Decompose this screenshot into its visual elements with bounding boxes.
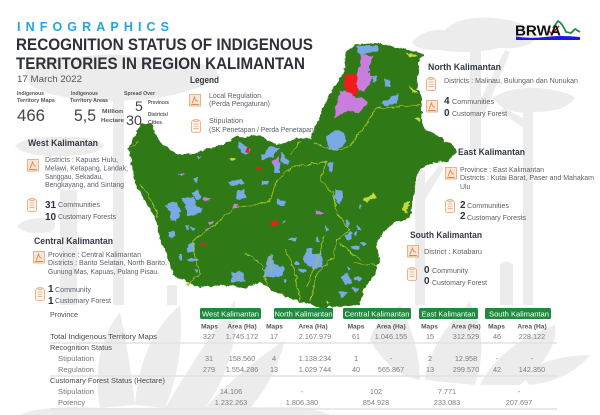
panel: North Kalimantan: North Kalimantan	[428, 62, 501, 72]
panel: North Kalimantan: 0	[444, 108, 450, 119]
purple: regulation areas	[179, 55, 373, 230]
row: recognition regulation: 142.350	[519, 365, 545, 374]
stat: spread: Districts/	[148, 112, 169, 118]
legend: (SK Penetapan / Perda Penetapan)	[209, 127, 316, 134]
stat: territory maps	[17, 91, 55, 125]
panel: Central Kalimantan: Customary Forest	[55, 298, 111, 305]
row: recognition stipulation: 1.138.234	[299, 354, 331, 363]
icon: regulation	[446, 168, 456, 179]
panel: North Kalimantan: Communities	[452, 99, 495, 106]
stat: territory areas: Indigenous	[71, 91, 98, 97]
panel: West Kalimantan: Customary Forests	[58, 214, 117, 221]
header	[16, 20, 313, 85]
icon: local regulation	[190, 94, 200, 106]
row: recognition stipulation: -	[496, 354, 499, 363]
panel: East Kalimantan: Ulu	[460, 184, 471, 191]
legend: Legend	[190, 75, 219, 85]
panel: North Kalimantan: Districts : Malinau, Bulungan dan Nunukan	[444, 78, 578, 85]
row: total maps: 312.529	[453, 332, 479, 341]
panel: Central Kalimantan	[34, 236, 167, 307]
legend: (Perda Pengaturan)	[209, 101, 270, 108]
row: recognition status heading: Recognition Status	[50, 343, 112, 352]
row: recognition regulation: 279	[203, 365, 215, 374]
row: recognition stipulation: -	[390, 354, 393, 363]
date: 17 March 2022	[17, 74, 82, 85]
column tabs: East Kalimantan	[422, 312, 476, 318]
column headers: Area (Ha)	[376, 324, 406, 330]
panel: East Kalimantan: 2	[460, 200, 466, 211]
stat: territory maps: Territory Maps	[17, 98, 55, 104]
panel: West Kalimantan: 10	[45, 212, 57, 223]
stat: territory areas	[70, 91, 124, 125]
row: forest stipulation: 102	[370, 387, 382, 396]
row: forest potency	[58, 398, 532, 407]
row: customary forest heading: Customary Forest Status (Hectare)	[50, 376, 165, 385]
row: total maps: Total Indigenous Territory Maps	[50, 332, 157, 341]
panel: South Kalimantan	[408, 230, 487, 287]
row: total maps: 1.745.172	[226, 332, 258, 341]
panel: East Kalimantan: East Kalimantan	[458, 147, 525, 157]
panel: West Kalimantan: 31	[45, 200, 57, 211]
panel: North Kalimantan: Customary Forest	[452, 111, 507, 118]
panel: West Kalimantan: Districts : Kapuas Hulu,	[45, 157, 118, 164]
stat: spread: Provinces	[148, 100, 169, 106]
row: recognition regulation	[58, 365, 545, 374]
row: recognition regulation: 13	[270, 365, 278, 374]
logo: BRWA: BRWA	[515, 24, 562, 40]
icon: stipulation	[36, 287, 44, 300]
row: total maps: 46	[493, 332, 501, 341]
row: forest stipulation: -	[301, 387, 304, 396]
column tabs: North Kalimantan	[274, 312, 333, 318]
panel: North Kalimantan: 4	[444, 96, 450, 107]
logo: BRWA	[515, 21, 580, 40]
yellow-green: provincial boundaries and rivers	[132, 105, 420, 302]
row: recognition stipulation: 1	[354, 354, 358, 363]
column tabs: Central Kalimantan	[344, 312, 410, 318]
icon: regulation	[34, 252, 44, 263]
panel: South Kalimantan: 0	[424, 276, 430, 287]
panel: West Kalimantan: West Kalimantan	[28, 138, 98, 148]
stat: territory areas: Hectare	[101, 118, 124, 124]
row: total maps: 17	[270, 332, 278, 341]
stat: territory areas: 5,5	[74, 106, 96, 125]
map of Kalimantan	[130, 45, 455, 307]
column headers: Maps	[266, 324, 283, 330]
panel: East Kalimantan: Districts : Kutai Barat, Paser and Mahakam	[460, 175, 594, 182]
stat: territory maps: Indigenous	[17, 91, 44, 97]
row: recognition regulation: 42	[493, 365, 501, 374]
legend	[190, 75, 316, 134]
column headers: Maps	[201, 324, 218, 330]
red: stipulation areas	[201, 74, 358, 247]
icon: stipulation	[446, 199, 454, 212]
column tabs	[200, 308, 551, 319]
column tabs: South Kalimantan	[489, 312, 549, 318]
icon: regulation	[28, 160, 38, 171]
panel: West Kalimantan: Sanggau, Sekadau,	[45, 174, 103, 181]
icon: stipulation	[192, 119, 200, 132]
row: total maps: 15	[426, 332, 434, 341]
panel: East Kalimantan: Province : East Kalimantan	[460, 167, 544, 174]
row: forest potency: 1.806.380	[286, 398, 318, 407]
row: total maps: 2.167.979	[299, 332, 331, 341]
row: forest potency: 854.928	[363, 398, 389, 407]
stat: spread	[124, 91, 169, 128]
stat: territory areas: Million	[102, 109, 124, 115]
row: recognition stipulation: 158.560	[229, 354, 255, 363]
row: forest potency: 233.083	[434, 398, 460, 407]
icon: stipulation	[426, 77, 436, 90]
column headers: Area (Ha)	[517, 324, 547, 330]
forest land	[130, 45, 455, 307]
panel: Central Kalimantan: Province : Central Kalimantan	[48, 252, 141, 259]
column headers	[50, 310, 547, 330]
panel: Central Kalimantan: 1	[48, 296, 54, 307]
row: recognition stipulation: 12.958	[455, 354, 477, 363]
column tabs: West Kalimantan	[202, 312, 259, 318]
row: total maps: 327	[203, 332, 215, 341]
row: forest stipulation: Stipulation	[58, 387, 94, 396]
row: recognition regulation: 299.570	[453, 365, 479, 374]
row: total maps: 1.046.155	[375, 332, 407, 341]
panel: South Kalimantan: Community	[432, 268, 469, 275]
yellow-green: coastal patches	[229, 53, 419, 304]
panel: East Kalimantan	[446, 147, 594, 222]
column headers: Maps	[348, 324, 365, 330]
panel: West Kalimantan: Bengkayang, and Sintang	[45, 182, 124, 189]
panel: South Kalimantan: South Kalimantan	[410, 230, 482, 240]
blue: mapped indigenous territories	[166, 46, 398, 298]
row: recognition stipulation: 31	[205, 354, 213, 363]
data table	[50, 308, 557, 409]
row: recognition stipulation	[58, 354, 534, 363]
legend: Local Regulation	[209, 93, 261, 100]
eyebrow: infographics: INFOGRAPHICS	[17, 20, 169, 34]
row: recognition stipulation: -	[531, 354, 534, 363]
stat: territory areas: Territory Areas	[70, 98, 108, 104]
row: forest potency: 207.697	[506, 398, 532, 407]
row: recognition regulation: 1.029.744	[299, 365, 331, 374]
panel: South Kalimantan: District : Kotabaru	[424, 249, 482, 256]
icon: stipulation	[28, 198, 36, 212]
row: forest potency: 1.232.263	[215, 398, 247, 407]
column headers: Maps	[488, 324, 505, 330]
panel: East Kalimantan: Customary Forests	[467, 215, 527, 222]
panel: West Kalimantan	[28, 138, 128, 223]
summary stats	[17, 91, 169, 128]
stat: spread: Cities	[148, 120, 162, 126]
row: recognition regulation: 13	[426, 365, 434, 374]
panel: West Kalimantan: Melawi, Ketapang, Landak,	[45, 166, 128, 172]
row: forest stipulation	[58, 387, 521, 396]
panel: Central Kalimantan: Districts : Barito Selatan, North Barito,	[48, 260, 167, 267]
legend: Stipulation	[209, 118, 243, 125]
stat: territory maps: 466	[17, 106, 45, 125]
stat: spread: 30	[126, 112, 142, 128]
icon: regulation	[408, 246, 418, 257]
stat: spread: 5	[135, 98, 143, 114]
row: total maps: 228.122	[519, 332, 545, 341]
row: recognition stipulation: Stipulation	[58, 354, 94, 363]
column headers: Area (Ha)	[227, 324, 257, 330]
column headers: Province	[50, 310, 78, 319]
panel: Central Kalimantan: Gunung Mas, Kapuas, Pulang Pisau.	[48, 269, 159, 276]
panel: South Kalimantan: 0	[424, 265, 430, 276]
stat: spread: Spread Over	[124, 91, 155, 97]
row: recognition stipulation: 2	[428, 354, 432, 363]
title line 1: RECOGNITION STATUS OF INDIGENOUS	[16, 35, 313, 54]
row: recognition stipulation: 4	[272, 354, 276, 363]
panel: East Kalimantan: Communities	[467, 203, 510, 210]
row: forest stipulation: 14.106	[220, 387, 242, 396]
row: forest potency: Potency	[58, 398, 85, 407]
panel: East Kalimantan: 2	[460, 211, 466, 222]
row: recognition regulation: 565.867	[378, 365, 404, 374]
column headers: Maps	[421, 324, 438, 330]
row: recognition regulation: 40	[352, 365, 360, 374]
column headers: Area (Ha)	[298, 324, 328, 330]
panel: Central Kalimantan: 1	[48, 284, 54, 295]
title line 2: TERRITORIES IN REGION KALIMANTAN	[16, 54, 305, 73]
panel: North Kalimantan	[426, 62, 578, 119]
row: recognition regulation: Regulation	[58, 365, 94, 374]
icon: stipulation	[408, 267, 416, 280]
row: forest stipulation: -	[518, 387, 521, 396]
panel: West Kalimantan: Communities	[58, 202, 101, 209]
row: recognition regulation: 1.554.286	[226, 365, 258, 374]
row: total maps: 61	[352, 332, 360, 341]
row: forest stipulation: 7.771	[438, 387, 456, 396]
column headers: Area (Ha)	[451, 324, 481, 330]
panel: South Kalimantan: Customary Forest	[432, 280, 487, 287]
panel: Central Kalimantan: Community	[55, 287, 92, 294]
row: total maps	[50, 332, 545, 341]
icon: regulation	[426, 100, 438, 112]
panel: Central Kalimantan: Central Kalimantan	[34, 236, 113, 246]
